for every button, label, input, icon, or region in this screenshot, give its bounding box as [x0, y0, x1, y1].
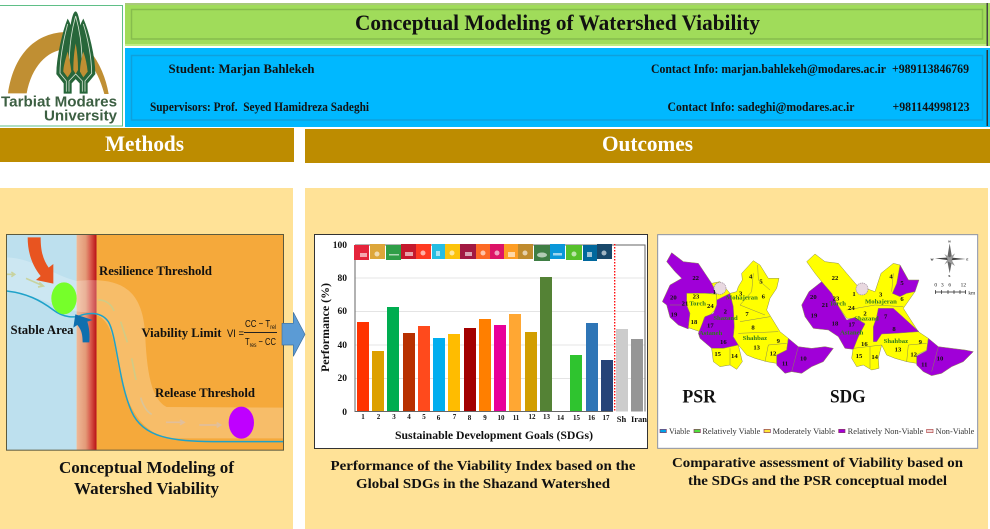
- sub-basin numbers: 5: [900, 280, 904, 287]
- sub-basin numbers: 5: [759, 279, 763, 286]
- sub-basin numbers: 10: [800, 356, 807, 363]
- sub-basin numbers: 19: [671, 312, 678, 319]
- x tick labels: [361, 413, 647, 424]
- x axis title: Sustainable Development Goals (SDGs): [395, 430, 593, 442]
- sub-basin numbers: 23: [693, 294, 700, 301]
- formula: viability index: [227, 319, 277, 349]
- sub-basin numbers: 7: [884, 314, 888, 321]
- diagram: watershed viability concept: [6, 234, 305, 450]
- region names: Shahbaz: [884, 338, 908, 345]
- label: Resilience Threshold: Resilience Threshold: [99, 264, 212, 278]
- sub-basin numbers: 4: [749, 274, 753, 281]
- caption: conceptual modeling: Conceptual Modeling of: [59, 458, 235, 477]
- sub-basin numbers: 17: [707, 322, 714, 329]
- heading bar: Outcomes: Outcomes: [602, 131, 693, 156]
- sub-basin numbers: 14: [871, 354, 879, 361]
- formula: viability index: T: [245, 337, 251, 348]
- sub-basin numbers: 9: [919, 339, 923, 346]
- x tick labels: 15: [573, 414, 580, 422]
- sub-basin numbers: 17: [848, 321, 856, 328]
- legend: Non-Viable: [936, 427, 975, 436]
- region names: Mohajeran: [865, 298, 897, 305]
- y axis title: Performance (%): [320, 283, 332, 372]
- threshold line: [614, 244, 616, 412]
- sub-basin numbers: 8: [751, 324, 755, 331]
- label: Release Threshold: Release Threshold: [155, 386, 255, 400]
- sub-basin numbers: 22: [832, 275, 839, 282]
- y tick labels: 100: [333, 241, 347, 251]
- logo: Tarbiat Modares University: [0, 6, 122, 126]
- sub-basin numbers: 13: [895, 346, 902, 353]
- icon: north arrow: S: [948, 274, 950, 278]
- x tick labels: 17: [602, 414, 610, 422]
- axes: [355, 245, 645, 412]
- student contact: Contact Info: marjan.bahlekeh@modares.ac.ir: [651, 62, 886, 76]
- heading bar: Outcomes: [305, 129, 990, 163]
- sub-basin numbers: 24: [848, 305, 855, 312]
- bars: [357, 277, 643, 412]
- red pressure arrow: [28, 237, 53, 284]
- sub-basin numbers: 20: [810, 294, 817, 301]
- caption: conceptual modeling: [59, 458, 235, 498]
- legend: Viable: [669, 427, 690, 436]
- icon: brown arch and cypress trees: [8, 12, 109, 94]
- y tick labels: 0: [342, 408, 347, 418]
- arrow to outcomes: [282, 312, 305, 356]
- x tick labels: 12: [528, 413, 536, 421]
- region names: Shahbaz: [743, 335, 767, 342]
- y tick labels: [333, 241, 347, 418]
- sub-basin numbers: [670, 274, 944, 368]
- scale bar: 3: [941, 283, 944, 289]
- region names: Mohajeran: [726, 294, 758, 301]
- panel: outcomes background: [305, 188, 988, 529]
- x tick labels: Iran: [631, 414, 647, 424]
- sub-basin numbers: 16: [861, 341, 868, 348]
- x tick labels: 2: [377, 413, 381, 421]
- x tick labels: Sh: [617, 414, 626, 424]
- region names: Torch: [689, 301, 706, 308]
- sub-basin numbers: 10: [937, 356, 944, 363]
- y tick labels: 60: [338, 307, 347, 317]
- sub-basin numbers: 1: [713, 289, 716, 296]
- scale bar: 12: [961, 283, 966, 289]
- panel: methods background: [0, 188, 293, 529]
- heading bar: Methods: Methods: [105, 131, 184, 156]
- caption: SDG performance: [330, 459, 636, 492]
- sub-basin numbers: 6: [762, 294, 766, 301]
- x tick labels: 14: [557, 414, 564, 422]
- icon: north arrow: N: [948, 240, 950, 244]
- scale bar: 0: [934, 283, 937, 289]
- sub-basin numbers: 23: [833, 295, 840, 302]
- legend: [660, 427, 975, 436]
- sub-basin numbers: 21: [682, 301, 688, 308]
- heading bar: Methods: [0, 128, 294, 162]
- panel: viability maps: [658, 235, 978, 448]
- region names: Shazand: [713, 315, 738, 322]
- supervisors: Supervisors: Prof. Seyed Hamidreza Sadeghi: [150, 100, 369, 114]
- x tick labels: 10: [498, 414, 505, 422]
- sub-basin numbers: 12: [910, 351, 918, 358]
- caption: comparative assessment: the SDGs and the PSR conceptual model: [688, 474, 947, 489]
- caption: comparative assessment: [672, 456, 963, 489]
- sub-basin numbers: 18: [832, 321, 839, 328]
- region names: Torch: [829, 301, 846, 308]
- icon: Shazand city markers: [714, 282, 868, 295]
- region names: Astaneh: [840, 330, 864, 337]
- x tick labels: 1: [361, 413, 365, 421]
- blue recovery arrow: [73, 314, 93, 342]
- sub-basin numbers: 1: [852, 291, 856, 298]
- map label: PSR: PSR: [682, 387, 716, 408]
- sub-basin numbers: 2: [724, 308, 728, 315]
- student phone: +989113846769: [892, 62, 969, 76]
- sub-basin numbers: 19: [811, 312, 818, 319]
- caption: conceptual modeling: Watershed Viability: [74, 479, 220, 498]
- formula: viability index: − CC: [256, 337, 276, 348]
- region names: [689, 294, 908, 345]
- sub-basin numbers: 14: [731, 353, 738, 360]
- sub-basin numbers: 13: [753, 344, 761, 351]
- dashed flow arrows: [7, 272, 221, 427]
- icon: north arrow: W: [931, 257, 934, 261]
- sub-basin numbers: 4: [889, 274, 893, 281]
- sub-basin numbers: 7: [745, 311, 749, 318]
- label: Viability Limit: Viability Limit: [142, 326, 222, 340]
- sub-basin numbers: 3: [739, 290, 743, 297]
- sub-basin numbers: 6: [900, 296, 904, 303]
- scale bar: [934, 283, 976, 296]
- x tick labels: 6: [437, 414, 441, 422]
- sub-basin numbers: 18: [691, 319, 698, 326]
- formula: viability index: rel: [270, 324, 276, 331]
- sub-basin numbers: 22: [692, 275, 700, 282]
- x tick labels: 5: [422, 413, 426, 421]
- sub-basin numbers: 24: [707, 303, 714, 310]
- student name: Student: Marjan Bahlekeh: [168, 62, 315, 76]
- sub-basin numbers: 8: [892, 326, 896, 333]
- scale bar: km: [968, 290, 976, 296]
- icon: north arrow: [931, 240, 968, 278]
- supervisor contact: Contact Info: sadeghi@modares.ac.ir: [668, 100, 855, 114]
- sub-basin numbers: 9: [777, 338, 781, 345]
- legend: Relatively Non-Viable: [848, 427, 924, 436]
- map: PSR: [662, 253, 833, 373]
- formula: viability index: CC − T: [245, 319, 277, 330]
- x tick labels: 11: [513, 414, 520, 422]
- map label: SDG: SDG: [830, 387, 866, 408]
- supervisor phone: +981144998123: [892, 100, 970, 114]
- label: Stable Area: Stable Area: [10, 323, 74, 337]
- caption: SDG performance: Global SDGs in the Shazand Watershed: [356, 477, 610, 492]
- SDG icon strip: [354, 244, 612, 261]
- icon: north arrow: E: [966, 257, 968, 261]
- map: SDG: [802, 254, 973, 376]
- x tick labels: 16: [588, 414, 596, 422]
- chart: SDG performance bars: [314, 234, 648, 448]
- purple ball: [229, 407, 254, 439]
- logo wordmark: University: [44, 108, 118, 124]
- legend: Relatively Viable: [702, 427, 761, 436]
- stability curve: [7, 291, 283, 442]
- caption: SDG performance: Performance of the Viability Index based on the: [330, 459, 636, 474]
- sub-basin numbers: 15: [856, 353, 863, 360]
- sub-basin numbers: 2: [863, 310, 867, 317]
- x tick labels: 9: [483, 414, 487, 422]
- y tick labels: 80: [338, 274, 347, 284]
- sub-basin numbers: 15: [714, 351, 722, 358]
- sub-basin numbers: 21: [822, 302, 828, 309]
- x tick labels: 3: [392, 413, 396, 421]
- caption: comparative assessment: Comparative assessment of Viability based on: [672, 456, 963, 471]
- sub-basin numbers: 11: [782, 361, 788, 368]
- green ball: [51, 282, 77, 314]
- logo wordmark: Tarbiat Modares: [1, 94, 117, 110]
- pale valley band: [7, 257, 283, 438]
- heading: Conceptual Modeling of Watershed Viability: [355, 10, 760, 35]
- scale bar: 6: [948, 283, 951, 289]
- x tick labels: 4: [407, 413, 411, 421]
- region names: Astaneh: [699, 330, 723, 337]
- sub-basin numbers: 12: [770, 350, 777, 357]
- sub-basin numbers: 11: [921, 361, 927, 368]
- x tick labels: 8: [468, 414, 472, 422]
- y tick labels: 20: [338, 374, 347, 384]
- info banner: student and supervisors: [125, 48, 990, 127]
- formula: viability index: VI =: [227, 328, 244, 340]
- title banner: [125, 3, 990, 46]
- legend: Moderately Viable: [773, 427, 835, 436]
- sub-basin numbers: 3: [879, 292, 883, 299]
- y tick labels: 40: [338, 341, 347, 351]
- logo wordmark: [1, 94, 118, 124]
- sub-basin numbers: 20: [670, 294, 677, 301]
- region names: Shazand: [854, 316, 879, 323]
- x tick labels: 7: [453, 413, 457, 421]
- formula: viability index: res: [250, 342, 257, 349]
- sub-basin numbers: 16: [720, 339, 727, 346]
- light tree outlines: [60, 16, 92, 92]
- x tick labels: 13: [543, 413, 550, 421]
